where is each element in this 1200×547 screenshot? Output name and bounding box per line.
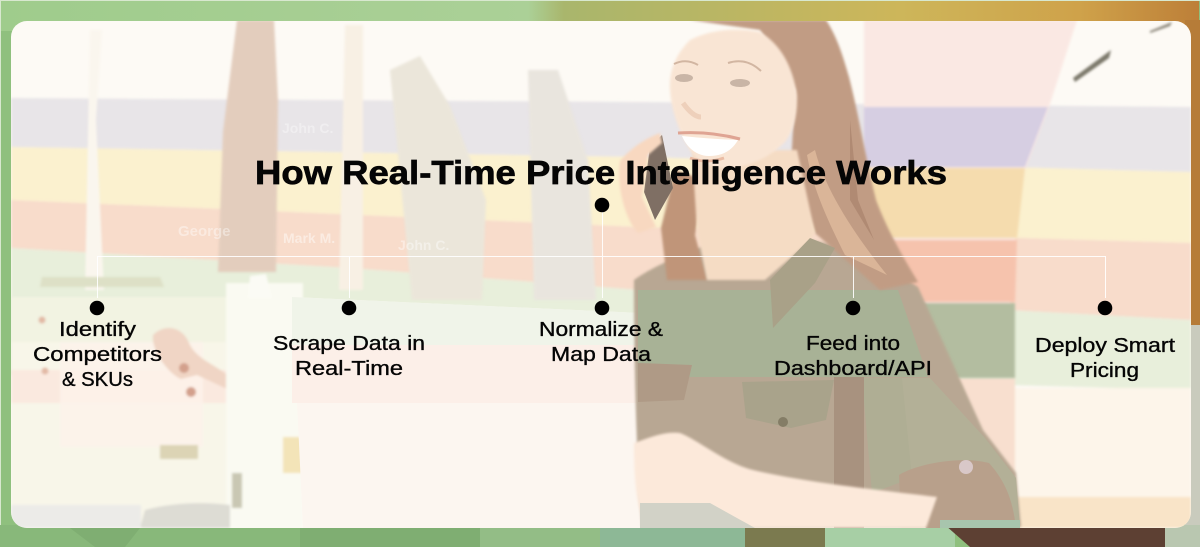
band labels in photo: Vivian A. — [405, 415, 463, 431]
step 5: deploy pricing: Pricing — [1070, 360, 1139, 382]
typing hand and arm — [634, 433, 937, 528]
woman — [619, 20, 1021, 528]
laptop — [292, 297, 635, 486]
step 4: dashboard feed: Feed into — [806, 333, 900, 355]
step 1: identify competitors: Competitors — [33, 344, 162, 366]
connector lines — [98, 205, 1106, 298]
title dot — [595, 198, 609, 212]
band labels in photo: George — [178, 223, 231, 240]
sewing machine and desk — [11, 274, 307, 528]
title: How Real-Time Price Intelligence Works — [255, 154, 947, 191]
step 2: scrape data: Scrape Data in — [273, 333, 425, 355]
band labels in photo: Mark M. — [283, 230, 335, 246]
step 3: normalize — [539, 301, 664, 366]
step 5: deploy pricing — [1035, 301, 1176, 382]
step 3: normalize: Normalize & — [539, 319, 664, 341]
left hair — [661, 170, 707, 280]
hanging clothes — [85, 20, 1172, 378]
step 1: identify competitors: Identify — [59, 319, 136, 341]
step 5: deploy pricing: Deploy Smart — [1035, 335, 1176, 357]
right hair — [690, 20, 918, 290]
hand at phone — [619, 133, 662, 233]
sleeve shadow strip — [940, 520, 1020, 528]
phone — [644, 135, 673, 220]
band labels in photo: John C. — [282, 120, 333, 136]
step 1: identify competitors — [33, 301, 162, 391]
band labels in photo — [178, 123, 448, 250]
step 1: identify competitors: & SKUs — [62, 369, 133, 391]
step 4: dashboard feed: Dashboard/API — [774, 358, 932, 380]
band labels in photo: Collin F. — [405, 473, 459, 489]
step 4: dashboard feed — [774, 301, 932, 380]
band labels in photo: John C. — [398, 237, 449, 253]
step 3: normalize: Map Data — [551, 344, 652, 366]
chart bands in photo background — [11, 98, 1191, 528]
face — [670, 30, 797, 168]
neck and collar — [692, 150, 815, 280]
step 2: scrape data — [273, 301, 425, 380]
shirt — [634, 240, 1021, 527]
step 2: scrape data: Real-Time — [295, 358, 403, 380]
